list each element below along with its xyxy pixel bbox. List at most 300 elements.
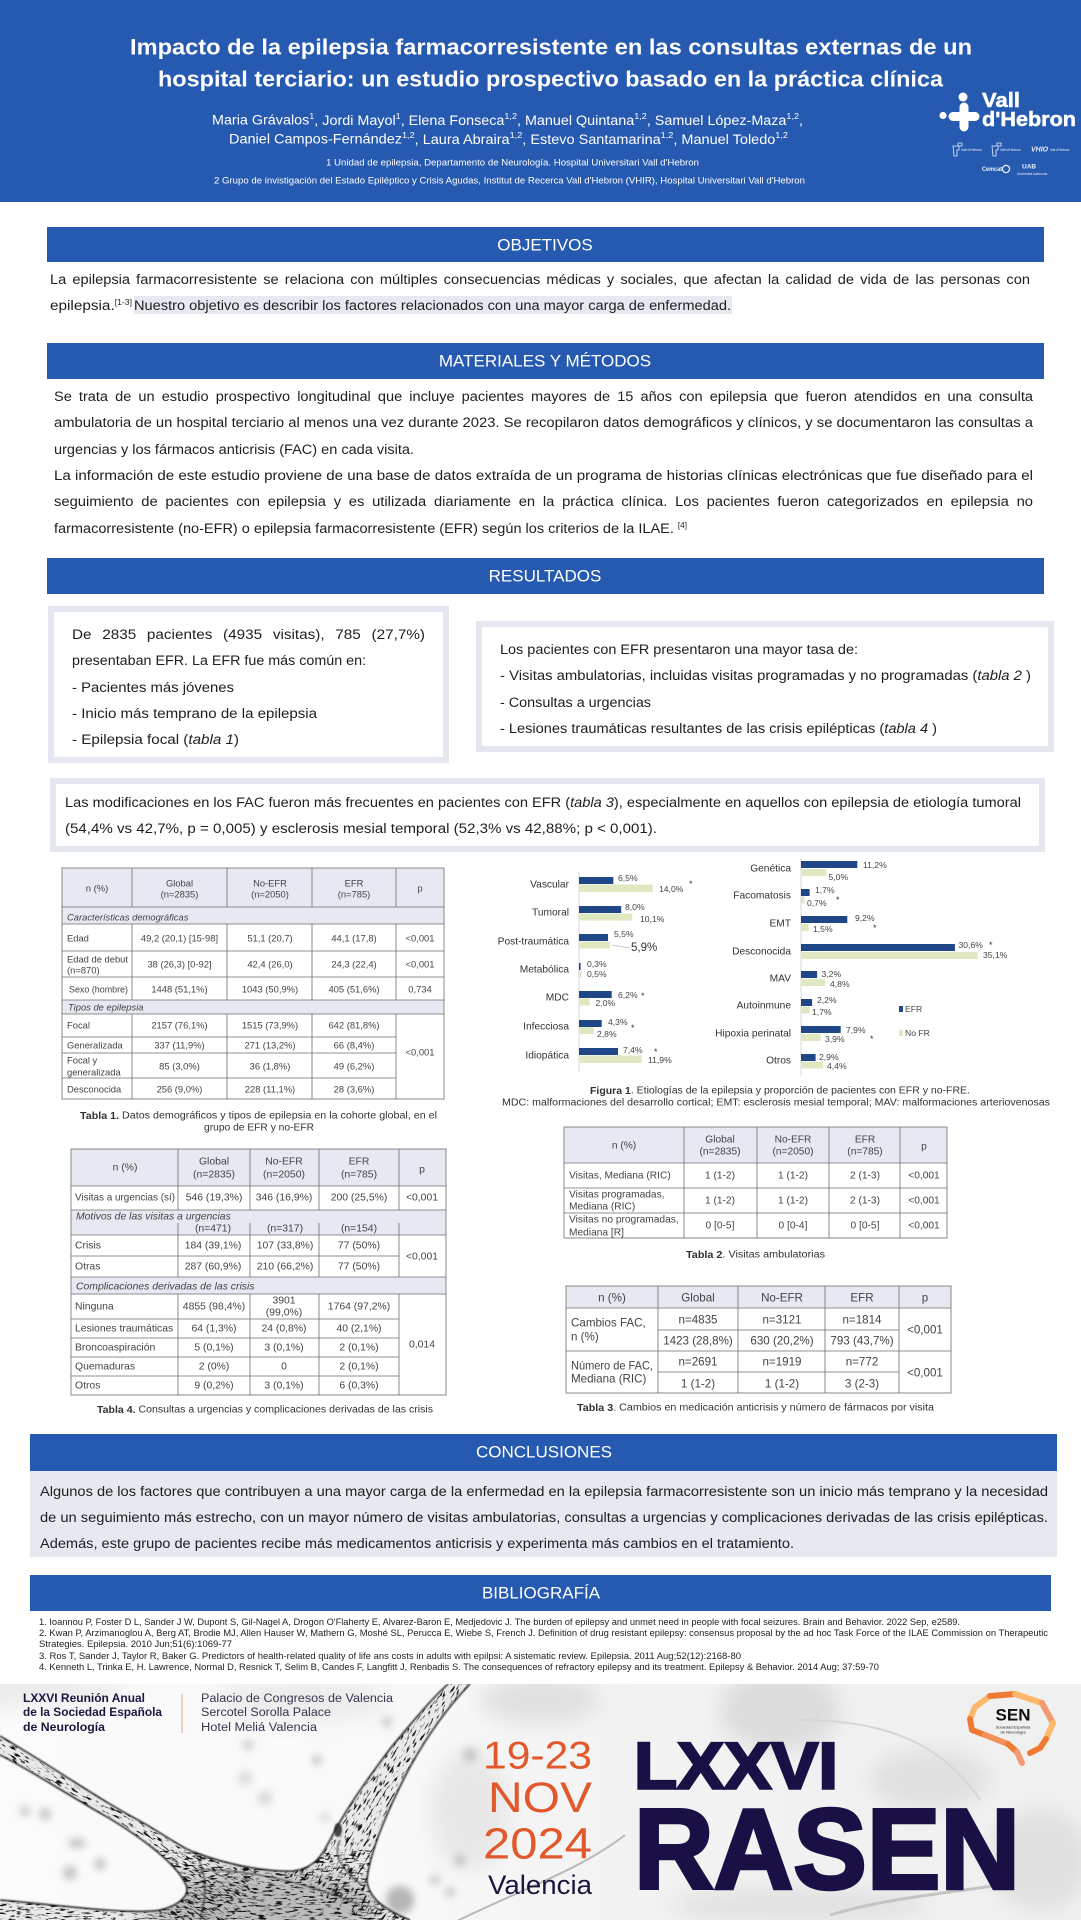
category labels: Vascular bbox=[530, 880, 570, 890]
table 4: 3901 bbox=[272, 1296, 296, 1306]
table 3: 3 (2-3) bbox=[845, 1378, 879, 1390]
authors: , Jordi Mayol bbox=[314, 112, 396, 128]
neuron bbox=[0, 1684, 472, 1920]
table 2: 0 [0-4] bbox=[779, 1220, 808, 1232]
section: objetivos heading bbox=[47, 227, 1044, 262]
table 1: 38 (26,3) [0-92] bbox=[147, 958, 212, 970]
table 2: Visitas, Mediana (RIC) bbox=[569, 1170, 671, 1182]
authors: 1,2 bbox=[661, 130, 674, 140]
logos: partner institutions bbox=[953, 143, 1070, 176]
value labels: 0,3% bbox=[587, 959, 607, 969]
authors: , Manuel Toledo bbox=[673, 132, 775, 146]
affiliations: 2 Grupo de invistigación del Estado Epiléptico y Crisis Agudas, Institut de Recerca Vall d'Hebron (VHIR), Hospital Universitari Vall d'Hebron bbox=[214, 176, 805, 186]
table 3: 1 (1-2) bbox=[765, 1378, 799, 1390]
table 1: n (%) bbox=[86, 882, 108, 894]
table 4: 287 (60,9%) bbox=[185, 1262, 241, 1272]
table 3: p bbox=[922, 1292, 928, 1304]
legend: No FR bbox=[905, 1028, 930, 1038]
panel: modificaciones FAC bbox=[53, 781, 1042, 849]
section: conclusiones: CONCLUSIONES bbox=[476, 1442, 612, 1462]
congress dates: Valencia bbox=[488, 1870, 593, 1900]
panel: modificaciones FAC: Las modificaciones en los FAC fueron más frecuentes en pacientes con EFR ( tabla 3), especialmente en aquellos con epilepsia de etiología tumoral bbox=[65, 795, 1021, 811]
value labels: 1,7% bbox=[812, 1007, 832, 1017]
table 4: 107 (33,8%) bbox=[257, 1240, 313, 1252]
logos: partner institutions: Vall d'Hebron bbox=[1050, 148, 1070, 152]
congress name: de la Sociedad Española bbox=[23, 1707, 163, 1719]
text: bibliografía: Strategies. Epilepsia. 2010 Jun;51(6):1069-77 bbox=[39, 1639, 232, 1649]
table 2: n (%) bbox=[612, 1140, 636, 1152]
table 4: 5 (0,1%) bbox=[194, 1342, 234, 1354]
text: materiales y métodos: farmacorresistente (no-EFR) o epilepsia farmacorresistente (EFR) según los criterios de la ILAE. bbox=[54, 521, 660, 537]
value labels: 35,1% bbox=[983, 950, 1008, 960]
table 3: 1423 (28,8%) bbox=[663, 1334, 733, 1348]
section: objetivos heading: OBJETIVOS bbox=[497, 236, 593, 254]
title bbox=[130, 34, 972, 92]
table 1: 337 (11,9%) bbox=[154, 1040, 205, 1050]
table 3: n=1919 bbox=[762, 1356, 802, 1368]
logos: partner institutions: Vall d'Hebron bbox=[961, 148, 982, 152]
table 2: 2 (1-3) bbox=[850, 1196, 880, 1206]
table 1: 85 (3,0%) bbox=[159, 1060, 200, 1072]
table 1: Desconocida bbox=[67, 1084, 122, 1094]
table 1: <0,001 bbox=[406, 958, 434, 970]
category labels: MAV bbox=[770, 974, 791, 984]
category labels: Post-traumática bbox=[498, 936, 569, 948]
caption: tabla 1 bbox=[80, 1110, 437, 1134]
caption: tabla 1: Tabla 1. Datos demográficos y tipos de epilepsia en la cohorte global, en el bbox=[80, 1110, 437, 1122]
section: conclusiones: Algunos de los factores que contribuyen a una mayor carga de la enfermedad en la epilepsia farmacorresistente son un inicio más temprano y la necesidad bbox=[40, 1484, 1048, 1500]
congress name bbox=[23, 1693, 163, 1734]
faint dendrites bbox=[455, 1720, 1000, 1920]
authors: , Estevo Santamarina bbox=[522, 132, 661, 146]
table 2: Mediana [R] bbox=[569, 1228, 624, 1238]
value labels: 4,4% bbox=[827, 1061, 847, 1071]
table 2: 1 (1-2) bbox=[778, 1196, 808, 1206]
text: bibliografía: 3. Ros T, Sander J, Taylor R, Baker G. Predictors of health-related quality of life ans costs in adults with epilpsi: A sistematic review. Epilepsia. 2011 Aug;52(12):2168-80 bbox=[39, 1651, 741, 1661]
table 4: Broncoaspiración bbox=[75, 1342, 156, 1354]
congress title: LXXVI RASEN bbox=[634, 1728, 1020, 1914]
congress dates: NOV bbox=[488, 1774, 592, 1822]
table 4: p bbox=[419, 1164, 425, 1176]
text: bibliografía: 2. Kwan P, Arzimanoglou A, Berg AT, Brodie MJ, Allen Hauser W, Mathern G, Moshé SL, Perucca E, Wiebe S, French J. Definition of drug resistant epilepsy: consensus proposal by the ad hoc Task Force of the ILAE Commission on Therapeutic bbox=[39, 1628, 1049, 1638]
authors: , Laura Abraira bbox=[415, 132, 510, 146]
value labels: * bbox=[641, 991, 645, 1001]
table 4: 4855 (98,4%) bbox=[183, 1302, 245, 1312]
table 4: 6 (0,3%) bbox=[339, 1380, 379, 1392]
authors: 1,2 bbox=[634, 111, 647, 121]
panel: mayor tasa: - Consultas a urgencias bbox=[500, 695, 651, 711]
table 2: 1 (1-2) bbox=[778, 1170, 808, 1182]
text: objetivos: Nuestro objetivo es describir los factores relacionados con una mayor carga de enfermedad. bbox=[134, 298, 731, 314]
value labels: 14,0% bbox=[659, 884, 684, 894]
value labels: * bbox=[631, 1023, 635, 1033]
background blur bbox=[0, 1670, 1081, 1920]
value labels: 1,5% bbox=[813, 924, 833, 934]
table 2: Visitas programadas, bbox=[569, 1190, 665, 1200]
authors: , Manuel Quintana bbox=[517, 112, 635, 128]
value labels: 6,2% bbox=[618, 990, 638, 1000]
logo: Vall d'Hebron: d'Hebron bbox=[982, 109, 1076, 131]
text: materiales y métodos: Se trata de un estudio prospectivo longitudinal que incluye pacientes mayores de 15 años con epilepsia que fueron atendidos en una consulta bbox=[54, 389, 1033, 405]
table 4 bbox=[71, 1149, 446, 1395]
table 3: n (%) bbox=[571, 1330, 599, 1344]
table 1: 36 (1,8%) bbox=[250, 1060, 290, 1072]
legend: EFR bbox=[905, 1004, 922, 1014]
table 1: 228 (11,1%) bbox=[245, 1084, 295, 1094]
text: bibliografía: 1. Ioannou P, Foster D L, Sander J W, Dupont S, Gil-Nagel A, Drogon O'Flaherty E, Alvarez-Baron E, Medjedovic J. The burden of epilepsy and unmet need in people with focal seizures. Brain and Behavior. 2022 Sep, e2589. bbox=[39, 1617, 960, 1627]
table 1: Sexo (hombre) bbox=[69, 984, 128, 994]
text: materiales y métodos: ambulatoria de un hospital terciario al menos una vez durante 2023. Se recopilaron datos demográficos y clínicos, y se documentaron las consultas a bbox=[54, 415, 1033, 431]
table 4: Ninguna bbox=[75, 1302, 114, 1312]
table 1: Focal bbox=[67, 1020, 90, 1030]
title: hospital terciario: un estudio prospectivo basado en la práctica clínica bbox=[158, 66, 944, 92]
table 2: 0 [0-5] bbox=[851, 1220, 880, 1232]
value labels: * bbox=[689, 879, 693, 889]
section: materiales y métodos heading: MATERIALES Y MÉTODOS bbox=[439, 352, 651, 370]
legend bbox=[899, 1004, 930, 1038]
table 1: Tipos de epilepsia bbox=[68, 1002, 144, 1012]
table 4: 346 (16,9%) bbox=[256, 1192, 312, 1204]
value labels: 1,7% bbox=[815, 885, 835, 895]
authors: 1,2 bbox=[775, 130, 788, 140]
table 1: (n=2835) bbox=[161, 888, 198, 900]
logos: partner institutions: VHIO bbox=[1031, 146, 1049, 154]
table 4: Global bbox=[199, 1156, 229, 1168]
table 1: 2157 (76,1%) bbox=[151, 1020, 208, 1030]
logo: SEN: de Neurología bbox=[1000, 1730, 1026, 1734]
value labels: 0,5% bbox=[587, 969, 607, 979]
category labels: EMT bbox=[769, 918, 791, 930]
table 1: 66 (8,4%) bbox=[334, 1040, 374, 1050]
table 2: 2 (1-3) bbox=[850, 1170, 880, 1182]
category labels: Autoinmune bbox=[737, 1000, 791, 1012]
title: Impacto de la epilepsia farmacorresistente en las consultas externas de un bbox=[130, 34, 972, 60]
panel: pacientes con EFR bbox=[51, 609, 446, 760]
panel: pacientes con EFR: De 2835 pacientes (4935 visitas), 785 (27,7%) bbox=[72, 627, 425, 643]
value labels: 10,1% bbox=[640, 914, 665, 924]
category labels: Desconocida bbox=[732, 946, 791, 958]
value labels: 5,0% bbox=[828, 872, 848, 882]
logo: Vall d'Hebron: Vall bbox=[982, 90, 1020, 112]
table 4: Lesiones traumáticas bbox=[75, 1324, 173, 1334]
table 4: (n=317) bbox=[267, 1224, 303, 1234]
congress dates: 2024 bbox=[483, 1820, 592, 1868]
authors: , Elena Fonseca bbox=[401, 112, 505, 128]
authors: 1 bbox=[396, 111, 401, 121]
no-EFR bars bbox=[579, 869, 978, 1068]
table 3: 793 (43,7%) bbox=[830, 1334, 894, 1348]
text: bibliografía: 4. Kenneth L, Trinka E, H. Lawrence, Normal D, Resnick T, Selim B, Candes F, Langfitt J, Renbadis S. The consequences of refractory epilepsy and its treatment. Epilepsy & Behavior. 2014 Aug; 37:59-70 bbox=[39, 1662, 879, 1672]
table 1: Edad de debut bbox=[67, 954, 128, 964]
value labels: 8,0% bbox=[625, 902, 645, 912]
left bars bbox=[579, 861, 955, 1061]
table 4: Otras bbox=[75, 1262, 100, 1272]
affiliations: 1 Unidad de epilepsia, Departamento de Neurología. Hospital Universitari Vall d'Hebron bbox=[326, 158, 699, 168]
table 1: (n=785) bbox=[338, 888, 370, 900]
authors: 1,2 bbox=[402, 130, 415, 140]
congress dates bbox=[483, 1734, 593, 1900]
category labels: Otros bbox=[766, 1056, 791, 1066]
table 4: EFR bbox=[349, 1156, 370, 1168]
logo: Vall d'Hebron bbox=[939, 90, 1076, 131]
panel: pacientes con EFR: - Inicio más temprano de la epilepsia bbox=[72, 706, 317, 722]
table 4: 64 (1,3%) bbox=[191, 1324, 237, 1334]
table 3: 1 (1-2) bbox=[681, 1378, 715, 1390]
table 1: 405 (51,6%) bbox=[328, 984, 380, 994]
congress venues: Palacio de Congresos de Valencia bbox=[201, 1693, 394, 1705]
table 4: 3 (0,1%) bbox=[264, 1380, 304, 1392]
logo: SEN: Sociedad Española bbox=[996, 1724, 1031, 1730]
category labels bbox=[498, 864, 791, 1066]
table 1: 51,1 (20,7) bbox=[247, 932, 293, 944]
authors: , Samuel López-Maza bbox=[647, 112, 787, 128]
category labels: Metabólica bbox=[520, 964, 569, 976]
table 4: n (%) bbox=[113, 1162, 137, 1174]
category labels: Facomatosis bbox=[733, 890, 791, 902]
section: conclusiones: Además, este grupo de pacientes recibe más medicamentos anticrisis y experimenta más cambios en el tratamiento. bbox=[40, 1536, 794, 1552]
value labels: 5,5% bbox=[614, 929, 634, 939]
table 3 bbox=[566, 1286, 951, 1393]
caption: tabla 1: grupo de EFR y no-EFR bbox=[204, 1122, 314, 1134]
text: materiales y métodos: seguimiento de pacientes con epilepsia y es utilizada diariamente en la práctica clínica. Los pacientes fueron categorizados en epilepsia no bbox=[54, 494, 1033, 510]
table 3: n (%) bbox=[598, 1292, 626, 1304]
table 2: EFR bbox=[855, 1134, 875, 1146]
table 4: 546 (19,3%) bbox=[186, 1192, 242, 1204]
table 4: Complicaciones derivadas de las crisis bbox=[76, 1282, 254, 1292]
value labels: 2,9% bbox=[819, 1052, 839, 1062]
table 4: 1764 (97,2%) bbox=[328, 1302, 390, 1312]
text: materiales y métodos bbox=[54, 389, 1033, 537]
congress dates: 19-23 bbox=[483, 1734, 592, 1778]
table 4: (n=154) bbox=[341, 1224, 377, 1234]
table 4: 0,014 bbox=[409, 1340, 435, 1350]
table 4: Otros bbox=[75, 1380, 100, 1392]
congress title: LXXVI RASEN: LXXVI bbox=[634, 1728, 838, 1802]
table 4: (99,0%) bbox=[266, 1308, 302, 1318]
value labels: 2,0% bbox=[596, 998, 615, 1008]
panel: mayor tasa: Los pacientes con EFR presentaron una mayor tasa de: bbox=[500, 642, 858, 658]
table 3: n=1814 bbox=[842, 1314, 882, 1326]
authors bbox=[212, 111, 803, 146]
table 4: <0,001 bbox=[406, 1252, 438, 1262]
table 4: (n=785) bbox=[341, 1170, 377, 1180]
chart: etiologías de la epilepsia bbox=[498, 858, 1008, 1076]
table 1: 1448 (51,1%) bbox=[151, 984, 208, 994]
table 4: 3 (0,1%) bbox=[264, 1342, 304, 1354]
table 1: 24,3 (22,4) bbox=[331, 958, 377, 970]
table 2: 1 (1-2) bbox=[705, 1196, 735, 1206]
header banner bbox=[0, 0, 1081, 202]
section: resultados heading: RESULTADOS bbox=[489, 566, 601, 586]
table 1: 49,2 (20,1) [15-98] bbox=[141, 932, 218, 944]
text: objetivos: epilepsia. bbox=[50, 298, 110, 314]
table 2: <0,001 bbox=[908, 1196, 940, 1206]
category labels: Infecciosa bbox=[523, 1022, 569, 1032]
table 1: (n=870) bbox=[67, 964, 100, 976]
table 4: 210 (66,2%) bbox=[257, 1262, 313, 1272]
table 4: (n=2835) bbox=[193, 1170, 235, 1180]
table 4: <0,001 bbox=[406, 1192, 438, 1204]
section: resultados heading bbox=[47, 558, 1044, 594]
authors: 1,2 bbox=[786, 111, 799, 121]
table 1: 42,4 (26,0) bbox=[247, 958, 293, 970]
table 3: No-EFR bbox=[761, 1292, 803, 1304]
table 1: 0,734 bbox=[408, 984, 432, 994]
table 1 bbox=[62, 868, 444, 1099]
table 2: <0,001 bbox=[908, 1220, 940, 1232]
text: materiales y métodos: [4] bbox=[678, 520, 687, 530]
table 1: 256 (9,0%) bbox=[157, 1084, 202, 1094]
table 2: p bbox=[921, 1142, 927, 1152]
table 4: No-EFR bbox=[265, 1156, 303, 1168]
table 2: Global bbox=[705, 1134, 735, 1146]
table 4: Visitas a urgencias (sí) bbox=[75, 1192, 175, 1204]
table 4: (n=471) bbox=[195, 1224, 231, 1234]
table 1: <0,001 bbox=[406, 1046, 434, 1058]
logos: partner institutions: Cemcat bbox=[982, 167, 1002, 173]
table 3: <0,001 bbox=[907, 1324, 943, 1336]
table 2: 0 [0-5] bbox=[706, 1220, 735, 1232]
value labels: 6,5% bbox=[618, 873, 638, 883]
panel: mayor tasa: - Lesiones traumáticas resultantes de las crisis epilépticas ( tabla 4 ) bbox=[500, 721, 937, 737]
table 1: 1043 (50,9%) bbox=[242, 984, 298, 994]
table 3: n=4835 bbox=[678, 1314, 718, 1326]
table 1: EFR bbox=[345, 878, 364, 888]
value labels: 0,7% bbox=[807, 898, 827, 908]
text: bibliografía bbox=[39, 1617, 1049, 1672]
table 4: 2 (0%) bbox=[199, 1362, 229, 1372]
table 1: 1515 (73,9%) bbox=[242, 1020, 298, 1030]
value labels: 5,9% bbox=[631, 942, 657, 954]
value labels: * bbox=[654, 1047, 658, 1057]
congress name: de Neurología bbox=[23, 1722, 106, 1734]
table 3: <0,001 bbox=[907, 1366, 943, 1380]
table 3: n=2691 bbox=[678, 1356, 718, 1368]
table 2: (n=785) bbox=[847, 1146, 883, 1158]
value labels: * bbox=[873, 923, 877, 933]
congress venues bbox=[201, 1693, 394, 1734]
value labels: 4,3% bbox=[608, 1017, 628, 1027]
table 2: Visitas no programadas, bbox=[569, 1214, 679, 1226]
value labels: 3,2% bbox=[822, 969, 841, 979]
table 4: Quemaduras bbox=[75, 1362, 135, 1372]
table 3: Cambios FAC, bbox=[571, 1316, 646, 1330]
value labels: 11,9% bbox=[648, 1055, 672, 1065]
panel: pacientes con EFR: - Pacientes más jóvenes bbox=[72, 680, 234, 696]
caption: tabla 2: Tabla 2 . Visitas ambulatorias bbox=[686, 1250, 825, 1260]
authors: Daniel Campos-Fernández bbox=[229, 132, 390, 146]
table 1: No-EFR bbox=[253, 878, 287, 888]
panel: mayor tasa: - Visitas ambulatorias, incluidas visitas programadas y no programadas ( tabla 2 ) bbox=[500, 668, 1031, 684]
logo: SEN: SEN bbox=[996, 1706, 1030, 1724]
table 4: 200 (25,5%) bbox=[331, 1192, 387, 1204]
text: objetivos bbox=[50, 272, 1030, 314]
value labels: 2,2% bbox=[817, 995, 837, 1005]
table 1: 642 (81,8%) bbox=[328, 1020, 380, 1030]
table 3: n=772 bbox=[846, 1356, 878, 1368]
value labels: * bbox=[836, 895, 840, 905]
category labels: Genética bbox=[750, 864, 791, 874]
logos: partner institutions: Universitat Autònoma bbox=[1017, 172, 1048, 176]
authors: 1,2 bbox=[504, 111, 517, 121]
value labels: * bbox=[870, 1034, 874, 1044]
value labels: 7,9% bbox=[846, 1025, 866, 1035]
congress title: LXXVI RASEN: RASEN bbox=[634, 1786, 1020, 1914]
table 4: 2 (0,1%) bbox=[339, 1362, 379, 1372]
table 4: 0 bbox=[281, 1362, 287, 1372]
value labels: 2,8% bbox=[597, 1029, 617, 1039]
table 1: Características demográficas bbox=[67, 912, 189, 922]
caption: figura 1: MDC: malformaciones del desarrollo cortical; EMT: esclerosis mesial temporal; MAV: malformaciones arteriovenosas bbox=[502, 1098, 1050, 1108]
table 1: 49 (6,2%) bbox=[334, 1060, 374, 1072]
affiliations bbox=[214, 158, 805, 186]
authors: Maria Grávalos bbox=[212, 112, 304, 128]
category labels: Idiopática bbox=[525, 1050, 569, 1062]
value labels: 3,9% bbox=[825, 1034, 845, 1044]
text: materiales y métodos: La información de este estudio proviene de una base de datos extraída de un programa de historias clínicas electrónicas que fue diseñado para el bbox=[54, 468, 1033, 484]
table 3: 630 (20,2%) bbox=[750, 1334, 814, 1348]
table 2 bbox=[564, 1127, 947, 1238]
congress venues: Hotel Meliá Valencia bbox=[201, 1722, 318, 1734]
table 4: Motivos de las visitas a urgencias bbox=[76, 1212, 231, 1222]
table 2: Mediana (RIC) bbox=[569, 1202, 635, 1212]
section: materiales y métodos heading bbox=[47, 343, 1044, 379]
table 4: 184 (39,1%) bbox=[185, 1240, 241, 1252]
panel: mayor tasa bbox=[479, 624, 1051, 749]
congress name: LXXVI Reunión Anual bbox=[23, 1693, 145, 1705]
category labels: Hipoxia perinatal bbox=[715, 1028, 791, 1040]
table 2: (n=2835) bbox=[699, 1146, 741, 1158]
panel: pacientes con EFR: presentaban EFR. La EFR fue más común en: bbox=[72, 653, 366, 669]
table 4: Crisis bbox=[75, 1240, 101, 1252]
table 4: 24 (0,8%) bbox=[261, 1324, 307, 1334]
table 4: 40 (2,1%) bbox=[336, 1324, 382, 1334]
text: objetivos: La epilepsia farmacorresistente se relaciona con múltiples consecuencias médicas y sociales, que afectan la calidad de vida de las personas con bbox=[50, 272, 1030, 288]
panel: modificaciones FAC: (54,4% vs 42,7%, p = 0,005) y esclerosis mesial temporal (52,3% vs 42,88%; p < 0,001). bbox=[65, 821, 657, 837]
table 4: 77 (50%) bbox=[338, 1262, 380, 1272]
table 1: 271 (13,2%) bbox=[244, 1040, 296, 1050]
table 3: Mediana (RIC) bbox=[571, 1372, 647, 1386]
value labels: 11,2% bbox=[863, 860, 887, 870]
table 4: (n=2050) bbox=[263, 1170, 305, 1180]
table 1: 44,1 (17,8) bbox=[331, 932, 377, 944]
table 1: Edad bbox=[67, 932, 89, 944]
category labels: Tumoral bbox=[532, 908, 569, 918]
value labels: 7,4% bbox=[623, 1045, 643, 1055]
table 1: Focal y bbox=[67, 1054, 98, 1066]
caption: figura 1: Figura 1. Etiologías de la epilepsia y proporción de pacientes con EFR y no-FRE. bbox=[590, 1086, 970, 1096]
text: materiales y métodos: urgencias y los fármacos anticrisis (FAC) en cada visita. bbox=[54, 442, 414, 458]
table 4: 77 (50%) bbox=[338, 1240, 380, 1252]
table 1: p bbox=[417, 882, 423, 894]
table 1: Global bbox=[166, 878, 193, 888]
caption: tabla 3: Tabla 3. Cambios en medicación anticrisis y número de fármacos por visita bbox=[577, 1402, 934, 1414]
footer banner: congress bbox=[0, 1684, 1081, 1920]
section: conclusiones: de un seguimiento más estrecho, con un mayor número de visitas ambulatorias, consultas a urgencias y complicaciones derivadas de las crisis epilépticas. bbox=[40, 1510, 1048, 1526]
congress venues: Sercotel Sorolla Palace bbox=[201, 1707, 331, 1719]
value labels bbox=[587, 860, 1008, 1071]
category labels: MDC bbox=[546, 992, 569, 1004]
table 2: 1 (1-2) bbox=[705, 1170, 735, 1182]
caption: tabla 4: Tabla 4. Consultas a urgencias y complicaciones derivadas de las crisis bbox=[97, 1404, 433, 1416]
text: objetivos: [1-3] bbox=[115, 298, 132, 306]
value labels: 9,2% bbox=[855, 913, 875, 923]
table 1: generalizada bbox=[67, 1066, 121, 1078]
section: conclusiones bbox=[30, 1434, 1057, 1557]
section: bibliografía heading bbox=[30, 1575, 1051, 1611]
value labels: * bbox=[989, 940, 993, 950]
caption: figura 1 bbox=[502, 1086, 1050, 1108]
